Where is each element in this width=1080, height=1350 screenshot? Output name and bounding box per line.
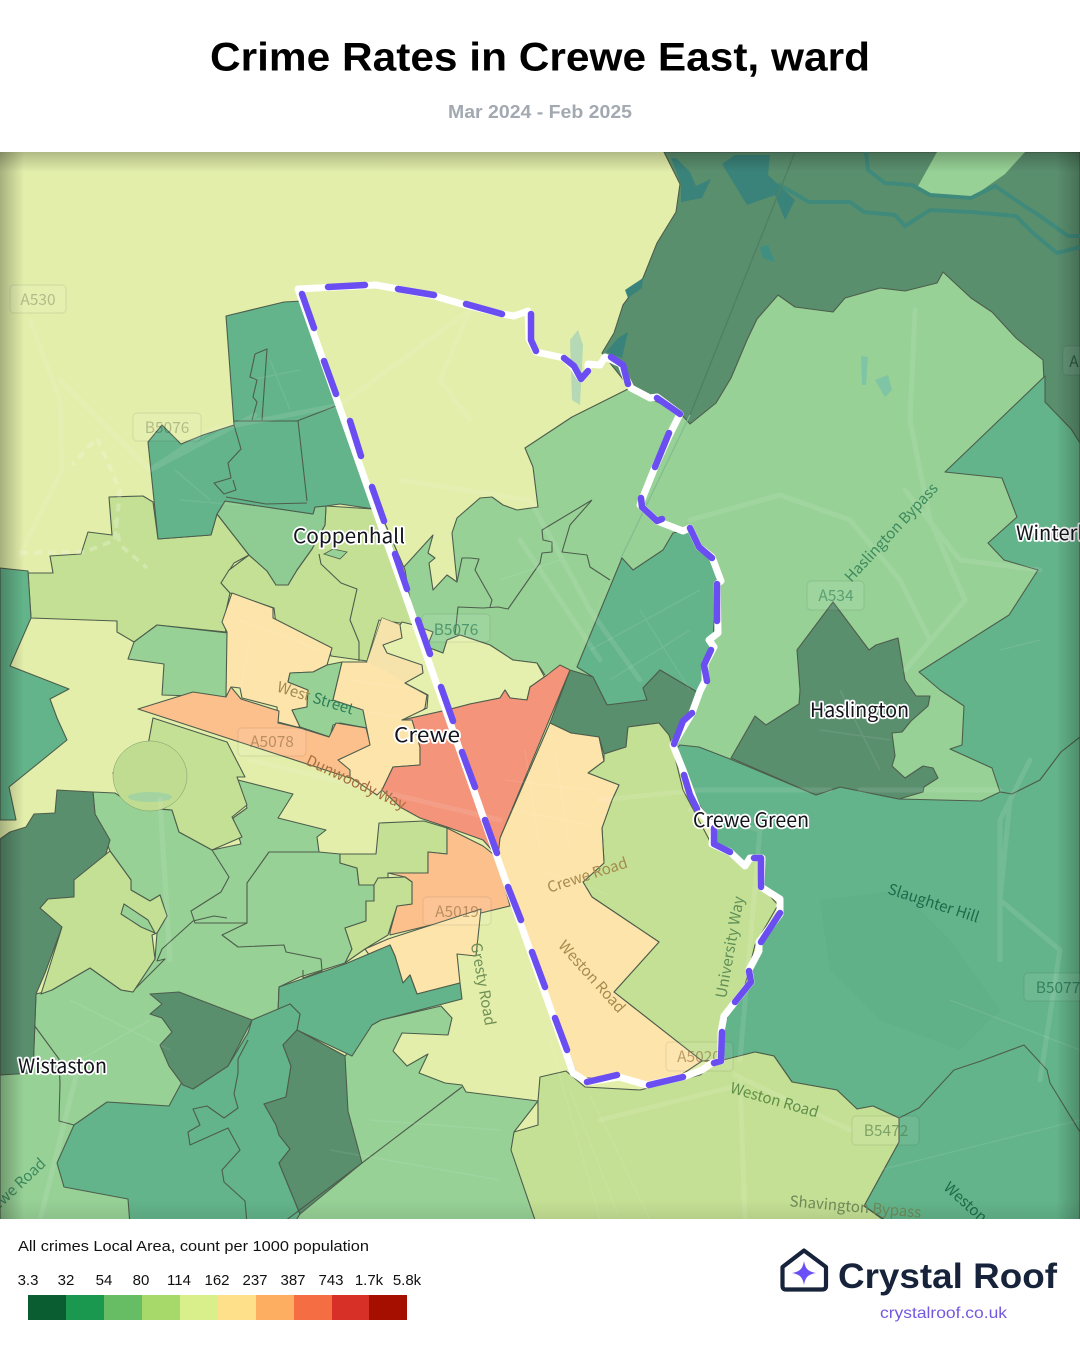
road shields: A5020	[677, 1045, 721, 1067]
roads	[20, 310, 1080, 1220]
legend values: 54	[96, 1272, 112, 1289]
region: centre pale yellow	[383, 622, 545, 720]
road names: Shavington Bypass	[789, 1190, 922, 1223]
legend values: 80	[133, 1272, 149, 1289]
road shields	[10, 285, 1080, 1145]
legend values: 387	[280, 1272, 306, 1289]
place labels: Crewe Green	[693, 804, 809, 833]
region: north-west mid-dark green wards	[148, 301, 374, 539]
legend values: 32	[58, 1272, 74, 1289]
title: Crime Rates in Crewe East, ward	[210, 36, 870, 80]
river and water	[570, 152, 1080, 560]
region: pale orange ward A	[222, 593, 332, 727]
road shields: B5076	[434, 618, 478, 640]
region: west light green north of the town centre	[28, 496, 414, 661]
place labels: Crewe	[394, 719, 460, 748]
region: dark green block 2	[264, 1030, 362, 1214]
region: dark green south of it	[550, 670, 697, 754]
legend values: 162	[204, 1272, 230, 1289]
road shields: B5076	[145, 416, 189, 438]
road names: Gresty Road	[466, 941, 501, 1027]
region: west edge mid-dark green	[0, 568, 69, 820]
place labels: Wistaston	[18, 1050, 107, 1079]
road names: Haslington Bypass	[840, 478, 942, 586]
region: West Street medium green	[288, 662, 367, 737]
map base: lowest-tier yellow-green areas	[0, 152, 776, 1131]
legend title: All crimes Local Area, count per 1000 population	[18, 1238, 369, 1255]
road names: West Street	[275, 676, 357, 719]
region: south pale orange	[365, 909, 481, 994]
region: mid-dark green east of Crewe station	[577, 530, 717, 705]
place labels: Coppenhall	[293, 520, 405, 549]
icon: house with star	[782, 1250, 826, 1290]
legend values: 3.3	[18, 1272, 38, 1289]
region: medium green block west of town	[128, 625, 228, 697]
region: south-centre mid-dark green	[278, 945, 462, 1056]
road names: Weston Road	[554, 935, 630, 1017]
logo: Crystal Roof	[782, 1250, 1057, 1322]
region: Coppenhall medium green	[217, 501, 326, 585]
region: light green east patch	[340, 821, 447, 885]
subtitle: date range: Mar 2024 - Feb 2025	[448, 102, 632, 122]
road names: Weston Road	[728, 1077, 821, 1122]
legend values: 114	[167, 1272, 191, 1289]
region: Haslington dark green	[731, 602, 938, 799]
region: Winterley mid-dark green	[919, 376, 1080, 794]
road names: Slaughter Hill	[885, 878, 982, 927]
region: south-west medium green	[0, 780, 538, 1220]
legend values: 743	[318, 1272, 344, 1289]
road names: Crewe Road	[544, 852, 630, 898]
ward boundary: Crewe East	[298, 285, 780, 1085]
place labels	[18, 517, 1080, 1079]
road names: Weston	[939, 1177, 992, 1227]
road shields: A	[1069, 350, 1079, 372]
region: pale orange ward B	[333, 618, 427, 795]
legend values: 1.7k	[355, 1272, 384, 1289]
road names: University Way	[710, 894, 749, 1000]
map edge vignette	[0, 152, 1080, 1220]
region: south-west mid-dark green	[57, 1004, 300, 1225]
region: Wistaston north light green	[40, 851, 167, 994]
road names: Dunwoody Way	[303, 750, 410, 815]
legend colour scale	[28, 1295, 407, 1320]
wordmark: Crystal Roof	[838, 1257, 1057, 1296]
road shields: A534	[818, 584, 854, 606]
region: west park light green	[113, 718, 247, 850]
legend	[18, 1238, 422, 1320]
legend values: 237	[242, 1272, 268, 1289]
region: dark green block 1	[150, 992, 252, 1089]
website: crystalroof.co.uk	[880, 1305, 1008, 1322]
railway line south-west	[287, 1086, 462, 1219]
region: Weston Road pale orange	[497, 723, 702, 1085]
road shields: B5472	[864, 1119, 908, 1141]
road shields: B5077	[1036, 976, 1080, 998]
region: south light green	[510, 1052, 899, 1221]
road names	[0, 478, 992, 1227]
region: top-right lighter patch	[917, 152, 1025, 198]
region: light green beside south orange	[345, 877, 412, 963]
legend values: 5.8k	[393, 1272, 422, 1289]
road shields: A530	[20, 288, 56, 310]
road shields: A5019	[435, 900, 479, 922]
region: south orange	[388, 828, 510, 935]
place labels: Haslington	[810, 694, 909, 723]
region: central orange A5078	[138, 687, 371, 778]
region: dark green west side	[0, 790, 110, 1075]
region: central and eastern medium green	[404, 273, 1044, 800]
region: park ellipse with pond	[113, 741, 187, 811]
road shields: A5078	[250, 730, 294, 752]
legend values	[18, 1272, 422, 1289]
region: University Way light green	[583, 723, 778, 1061]
region: top-right dark green rural area	[602, 152, 1080, 443]
region: town centre red	[382, 665, 570, 857]
region: Crewe Green and Slaughter Hill mid-dark green	[674, 737, 1080, 1220]
